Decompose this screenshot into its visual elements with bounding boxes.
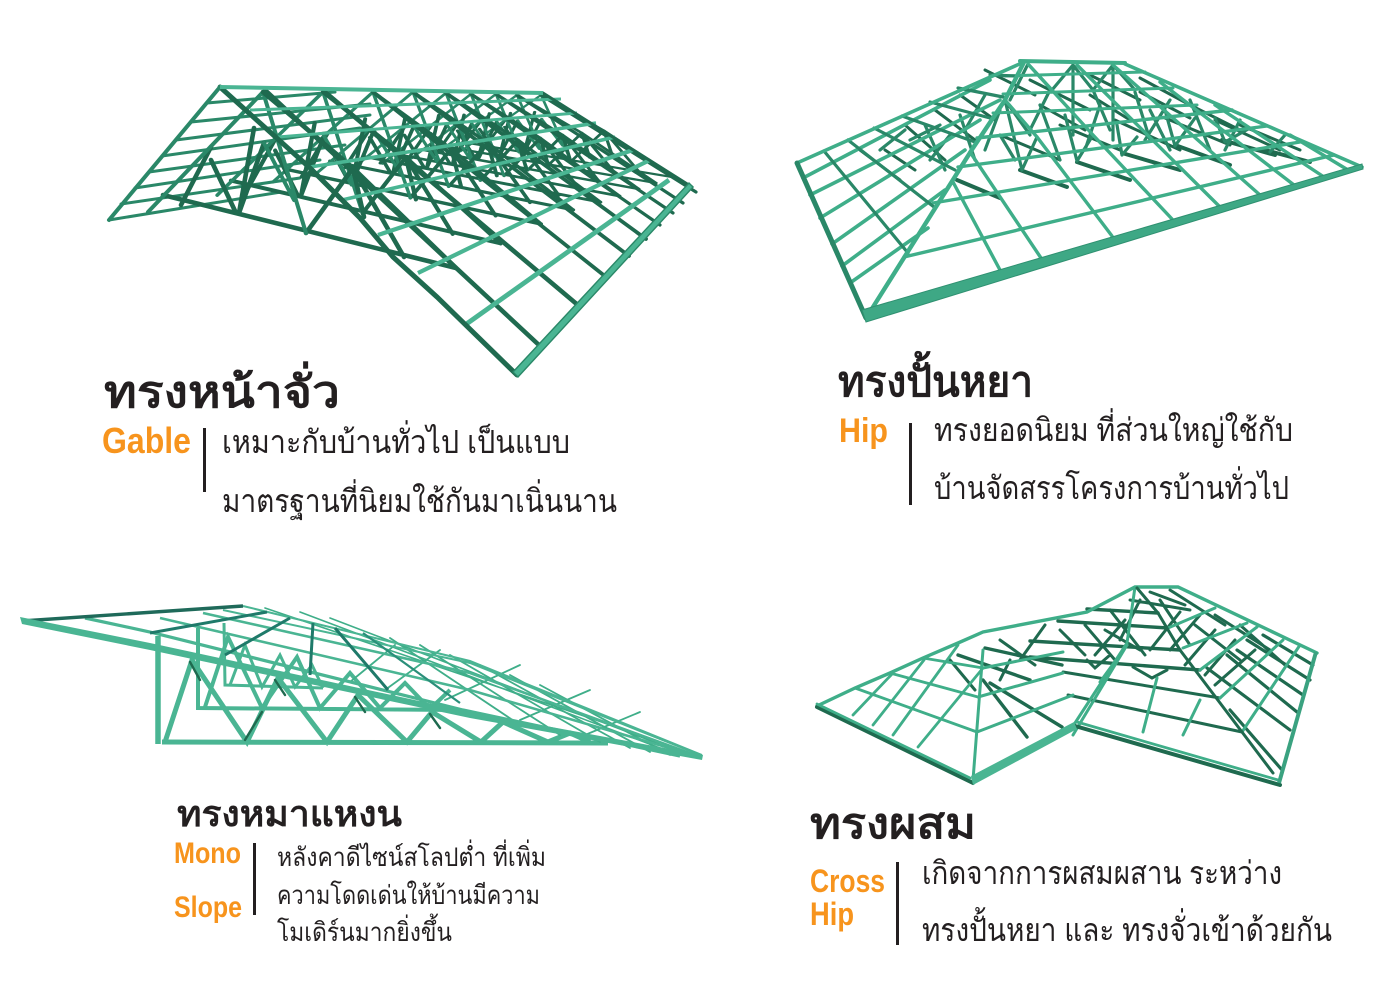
label: Mono Slope: Slope xyxy=(174,891,242,924)
label: Cross Hip: Cross xyxy=(810,863,885,899)
heading: gable: ทรงหน้าจั่ว xyxy=(104,361,340,417)
label: Mono Slope: Mono xyxy=(174,837,241,870)
description: gable xyxy=(222,420,617,521)
divider: cross hip xyxy=(896,862,899,945)
description: cross hip: ทรงปั้นหยา และ ทรงจั่วเข้าด้วยกัน xyxy=(922,907,1332,948)
description: mono slope: ความโดดเด่นให้บ้านมีความ xyxy=(277,880,540,910)
divider: hip xyxy=(909,423,912,505)
divider: mono slope xyxy=(253,843,256,915)
description: hip xyxy=(934,408,1293,506)
description: cross hip xyxy=(922,855,1332,948)
roof illustration: gable truss frame xyxy=(109,87,696,377)
label: Cross Hip xyxy=(810,863,885,932)
heading: mono slope: ทรงหมาแหงน xyxy=(177,793,402,834)
label: Mono Slope xyxy=(174,837,242,924)
heading: cross hip: ทรงผสม xyxy=(810,800,976,847)
label: Cross Hip: Hip xyxy=(810,896,854,932)
description: mono slope: โมเดิร์นมากยิ่งขึ้น xyxy=(277,913,452,947)
heading: hip: ทรงปั้นหยา xyxy=(838,350,1033,405)
description: cross hip: เกิดจากการผสมผสาน ระหว่าง xyxy=(922,855,1282,891)
description: gable: เหมาะกับบ้านทั่วไป เป็นแบบ xyxy=(222,420,570,460)
description: gable: มาตรฐานที่นิยมใช้กันมาเนิ่นนาน xyxy=(222,479,617,521)
label: Gable: Gable xyxy=(102,420,191,461)
description: hip: บ้านจัดสรรโครงการบ้านทั่วไป xyxy=(934,466,1289,506)
description: mono slope: หลังคาดีไซน์สโลปต่ำ ที่เพิ่ม xyxy=(277,839,546,872)
description: hip: ทรงยอดนิยม ที่ส่วนใหญ่ใช้กับ xyxy=(934,408,1293,448)
label: Hip: Hip xyxy=(839,412,888,450)
roof illustration: mono slope truss frame xyxy=(20,606,703,760)
roof illustration: hip truss frame xyxy=(797,61,1363,322)
description: mono slope xyxy=(277,839,546,947)
divider: gable xyxy=(203,428,206,492)
roof illustration: cross hip truss frame xyxy=(817,587,1317,785)
